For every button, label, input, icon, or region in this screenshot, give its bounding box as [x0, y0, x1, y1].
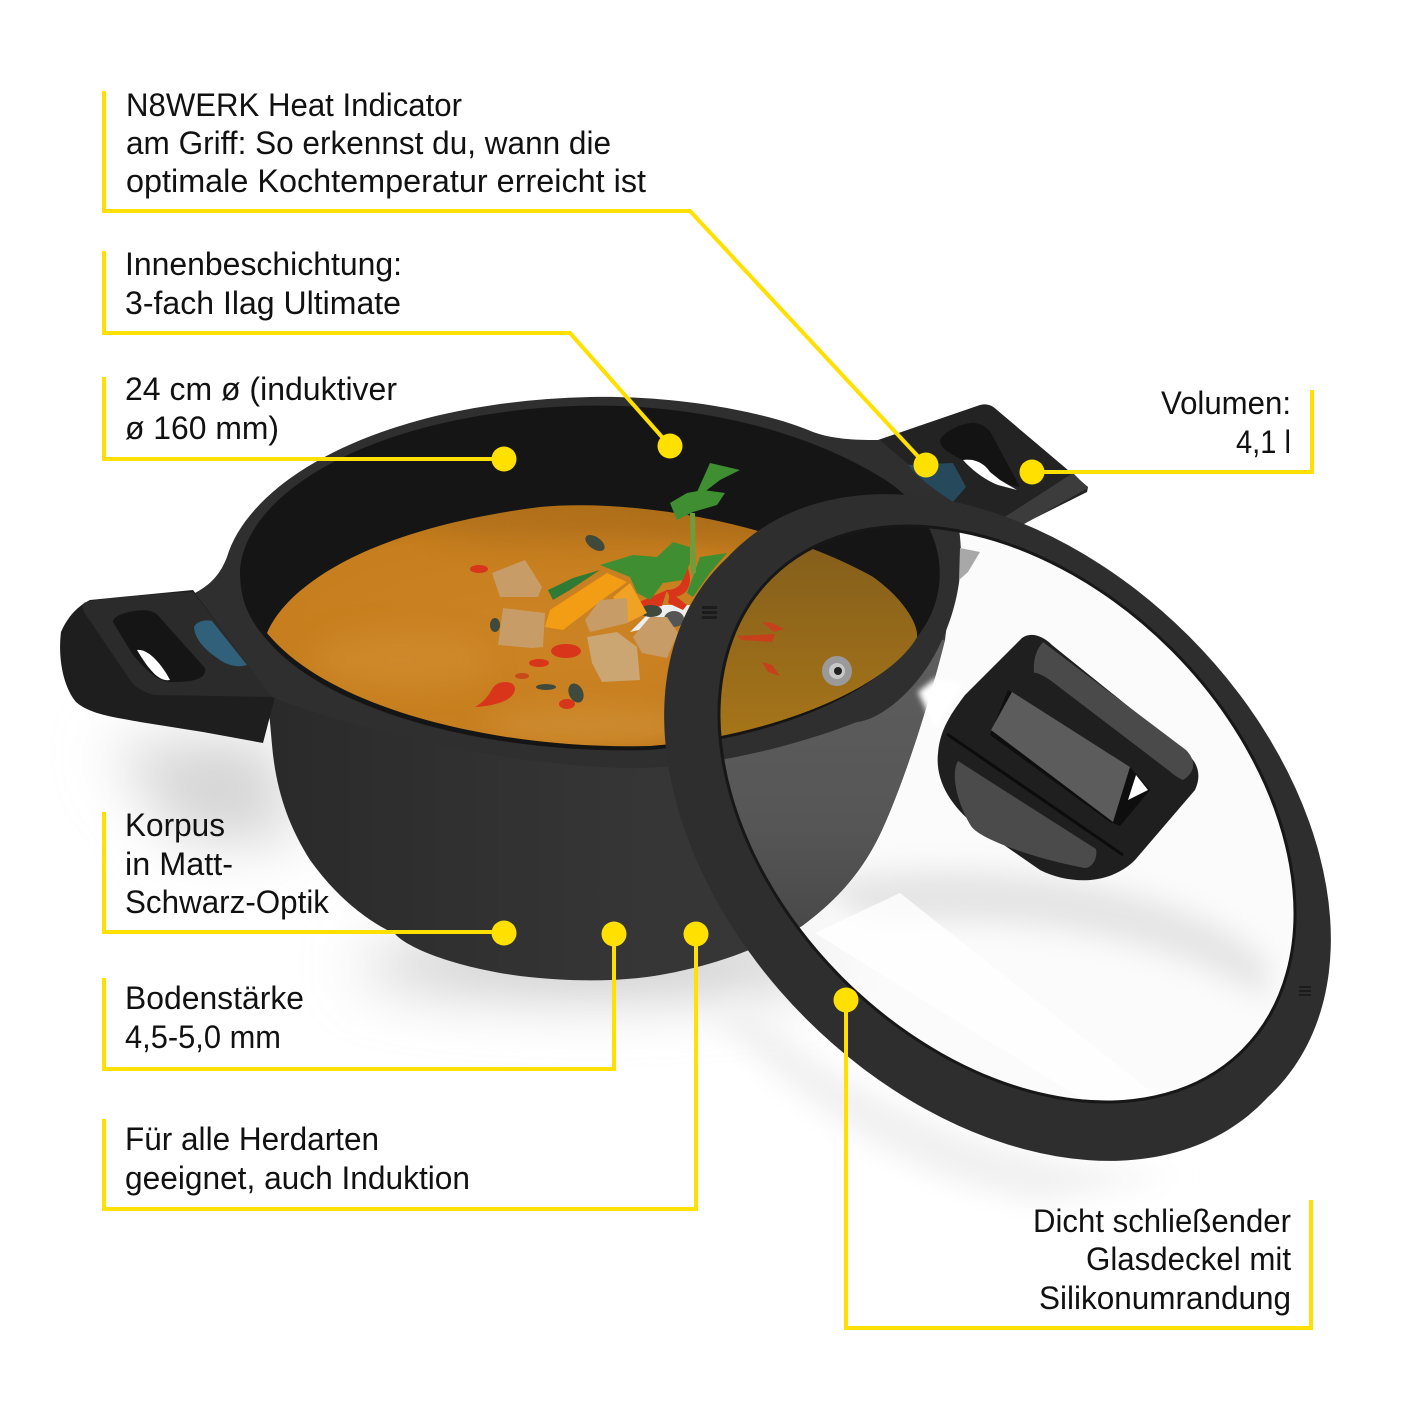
marker dot — [684, 922, 708, 946]
pot — [60, 397, 1088, 980]
callout: base thickness — [104, 922, 626, 1069]
glass tint and reflection behind pot — [816, 869, 1266, 988]
marker dot — [834, 988, 858, 1012]
pot body — [268, 560, 955, 980]
text: ø 160 mm) — [125, 410, 279, 446]
text — [1161, 385, 1291, 460]
text: in Matt- — [125, 846, 233, 882]
text — [125, 371, 397, 446]
text — [125, 980, 304, 1055]
text: Für alle Herdarten — [125, 1121, 379, 1157]
text: am Griff: So erkennst du, wann die — [126, 125, 611, 161]
text: N8WERK Heat Indicator — [126, 87, 462, 123]
text — [126, 87, 646, 199]
callout: glass lid — [834, 988, 1311, 1328]
text: 24 cm ø (induktiver — [125, 371, 397, 407]
soup shading — [310, 509, 770, 739]
right handle — [878, 404, 1088, 528]
glass view of pot — [720, 548, 980, 928]
text: Schwarz-Optik — [125, 884, 330, 920]
text: Silikonumrandung — [1039, 1280, 1291, 1316]
text: Bodenstärke — [125, 980, 304, 1016]
text — [125, 807, 330, 920]
marker dot — [492, 920, 516, 946]
text — [1033, 1203, 1291, 1316]
text: geeignet, auch Induktion — [125, 1160, 470, 1196]
text: 4,5-5,0 mm — [125, 1019, 281, 1055]
chili pieces — [470, 560, 690, 709]
bolt — [817, 657, 845, 685]
leader line — [104, 934, 614, 1069]
right handle hole — [940, 423, 1020, 487]
floor shadows — [110, 735, 1270, 1200]
left blue indicator — [194, 620, 247, 666]
callout: volume — [1020, 385, 1312, 484]
text: Glasdeckel mit — [1086, 1241, 1291, 1277]
callout: hob types — [104, 922, 708, 1209]
bolt seen through glass — [822, 656, 852, 686]
pot interior — [240, 406, 940, 750]
glass lid — [664, 494, 1331, 1161]
text: Innenbeschichtung: — [125, 246, 402, 282]
knob top bar — [1034, 642, 1193, 780]
garnish — [470, 463, 740, 709]
marker dot — [658, 434, 682, 458]
cream — [630, 605, 690, 632]
cilantro leaves — [548, 463, 740, 600]
lid knob — [938, 635, 1198, 880]
marker dot — [1020, 460, 1044, 484]
rim inner line — [606, 413, 1408, 1215]
marker dot — [492, 446, 516, 472]
text: 4,1 l — [1236, 424, 1291, 460]
left handle hole — [113, 610, 205, 682]
knob divider — [947, 734, 1123, 855]
leader line — [1032, 390, 1312, 472]
pumpkin seeds — [490, 532, 684, 705]
text: Dicht schließender — [1033, 1203, 1291, 1239]
knob lower pad — [955, 761, 1096, 868]
leader line — [104, 91, 926, 465]
callout: coating — [104, 246, 682, 458]
text: Korpus — [125, 807, 225, 843]
chili seen through glass — [737, 622, 784, 676]
leader line — [846, 1000, 1311, 1328]
croutons — [492, 560, 678, 682]
leader line — [104, 251, 670, 446]
marker dot — [602, 922, 626, 946]
leader line — [104, 934, 696, 1209]
silicone rim — [664, 494, 1331, 1161]
text: Volumen: — [1161, 385, 1291, 421]
leader line — [104, 812, 504, 932]
right blue indicator — [908, 463, 966, 502]
knob inner block — [990, 690, 1150, 826]
text — [125, 1121, 470, 1196]
text: optimale Kochtemperatur erreicht ist — [126, 163, 646, 199]
left handle — [60, 590, 275, 743]
callout: diameter — [104, 371, 516, 472]
rim and handle necks — [195, 397, 961, 768]
carrot slices — [613, 583, 647, 623]
leader line — [104, 377, 504, 459]
text — [125, 246, 402, 321]
soup — [267, 505, 917, 746]
marker dot — [914, 452, 938, 478]
callout: heat indicator — [104, 87, 938, 478]
callout: body — [104, 807, 516, 946]
text: 3-fach Ilag Ultimate — [125, 285, 401, 321]
rim logo marks — [702, 606, 1311, 996]
